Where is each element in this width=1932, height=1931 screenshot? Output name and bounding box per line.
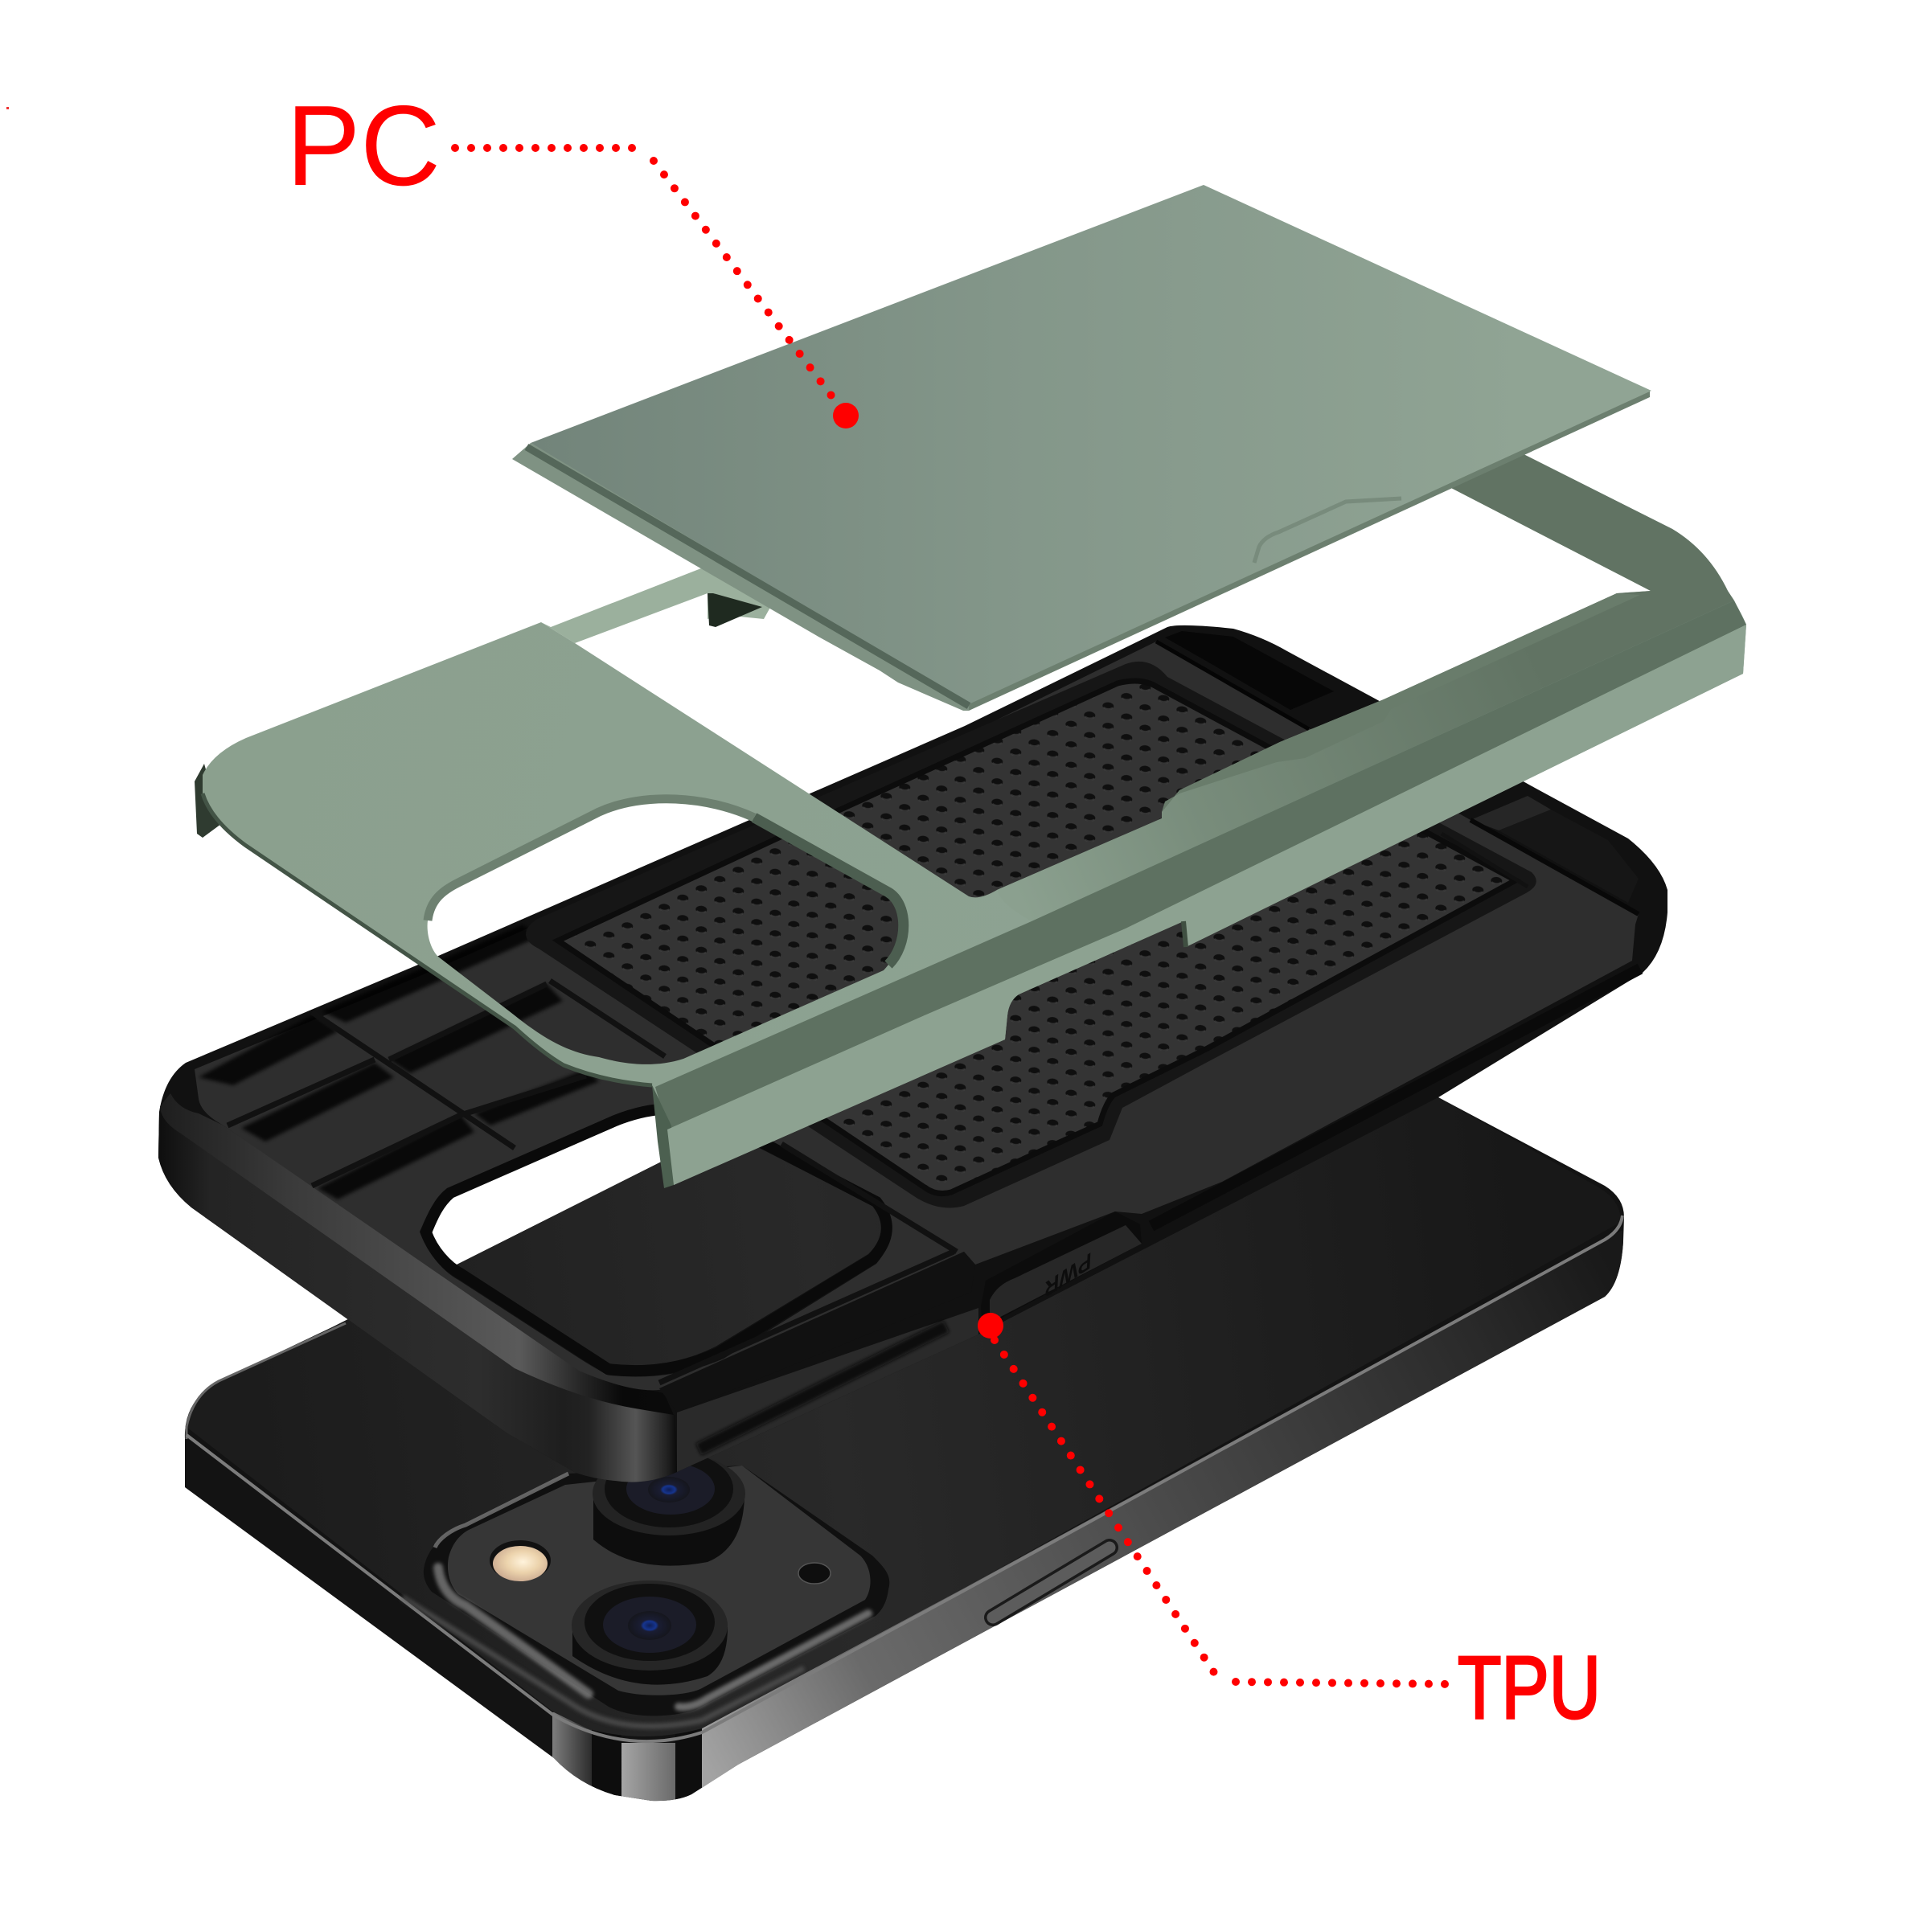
outer bottom edge strip <box>1151 969 1640 1226</box>
phone <box>185 1097 1624 1801</box>
plate lip <box>512 443 973 711</box>
frame main body <box>203 452 1746 1185</box>
callout: PC <box>286 82 859 428</box>
power button <box>981 1211 1142 1326</box>
right rib <box>1471 820 1639 914</box>
bottom slit <box>699 1326 946 1449</box>
tray surface <box>195 642 1639 1390</box>
rail top strip <box>1162 593 1640 812</box>
right inner rib <box>1442 834 1528 887</box>
power button face <box>990 1225 1142 1322</box>
camera bump <box>424 1450 889 1716</box>
leader line PC <box>455 148 836 402</box>
callout: TPU <box>978 1313 1601 1737</box>
glass inner reflection <box>402 1597 804 1726</box>
TPU inner case <box>158 625 1667 1482</box>
flash <box>490 1540 551 1581</box>
label PC: PC <box>286 82 441 210</box>
pad rim <box>526 662 1536 1207</box>
notch shadow <box>1183 921 1186 947</box>
compartment shadows <box>199 925 599 1199</box>
exploded diagram <box>6 105 1746 1801</box>
hole rim <box>426 1109 887 1371</box>
dark rail band <box>655 601 1746 1129</box>
leader line TPU <box>995 1340 1455 1684</box>
tray lower front band <box>158 1112 677 1482</box>
plate underside edge <box>969 391 1650 711</box>
tray upper front band <box>160 1093 674 1415</box>
phone rim highlights <box>187 1323 346 1439</box>
plate finger groove <box>1254 498 1401 563</box>
camera plate <box>448 1466 871 1695</box>
underside lip <box>195 764 221 838</box>
rail upper surface <box>997 452 1734 921</box>
tray ribs <box>228 981 957 1383</box>
PC outer frame <box>195 452 1746 1188</box>
lower band <box>667 625 1746 1185</box>
plate edge ridge <box>527 447 969 706</box>
panel edge shadow <box>203 793 652 1085</box>
right pocket <box>1499 810 1639 903</box>
strut tab <box>708 593 762 627</box>
bottom black strip <box>659 1252 975 1412</box>
phone right side band <box>702 1230 1623 1788</box>
phone back glass <box>187 969 1621 1736</box>
marker TPU <box>978 1313 1003 1339</box>
lower lens <box>572 1580 728 1685</box>
camera ring highlights <box>438 1568 589 1694</box>
PC sliding card plate <box>512 185 1651 711</box>
camera cutout rim upper-left <box>428 799 754 920</box>
phone body <box>185 969 1624 1801</box>
dotted pad <box>558 681 1516 1194</box>
marker PC <box>833 403 859 428</box>
camera cutout rim right <box>754 818 904 965</box>
upper lens <box>593 1450 745 1566</box>
tray body <box>158 625 1667 1482</box>
top rib <box>1156 642 1309 729</box>
top pocket <box>1165 631 1334 710</box>
microphone dot <box>798 1563 831 1584</box>
power label: PWR <box>1044 1246 1092 1302</box>
plate top <box>531 185 1651 704</box>
right pocket wall <box>1471 796 1551 830</box>
phone corner chrome <box>552 1712 702 1807</box>
top strut <box>541 568 772 643</box>
bottom side wall <box>677 1308 978 1472</box>
label TPU: TPU <box>1458 1638 1601 1737</box>
lower side edge <box>652 1085 674 1188</box>
side button <box>993 1548 1110 1617</box>
